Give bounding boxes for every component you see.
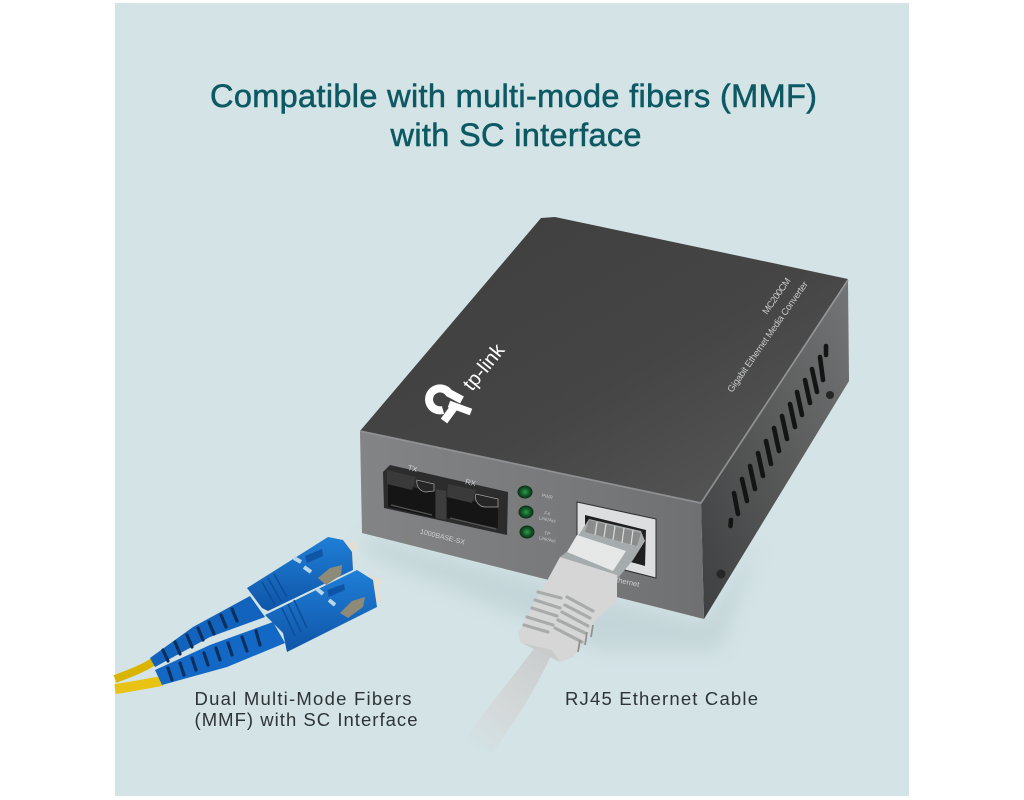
device shadow	[362, 535, 760, 650]
plug boot	[518, 557, 617, 662]
plug head	[560, 519, 645, 578]
background panel	[115, 3, 909, 796]
port labels: TX	[407, 463, 418, 474]
boot notches	[163, 609, 260, 680]
port labels: RX	[464, 477, 477, 488]
top face	[360, 217, 848, 503]
ethernet label: Ethernet	[611, 574, 641, 589]
upper connector	[247, 537, 353, 611]
fiber label	[194, 688, 418, 730]
fiber label: (MMF) with SC Interface	[194, 709, 418, 730]
title: Compatible with multi-mode fibers (MMF)	[210, 78, 817, 114]
SC ports	[383, 465, 508, 535]
cable label: RJ45 Ethernet Cable	[565, 688, 758, 709]
LED labels: FX	[544, 510, 552, 518]
logo: tp-link	[429, 339, 510, 421]
cable	[468, 645, 553, 753]
side vents	[730, 346, 826, 526]
edge highlights	[360, 280, 848, 503]
LED labels: TP	[544, 530, 551, 538]
upper connector detail	[305, 549, 323, 563]
port labels	[407, 463, 477, 547]
boot shade to cable	[522, 643, 560, 662]
RJ45 cable	[468, 519, 645, 753]
logo: tp-link: tp-link	[459, 339, 510, 395]
fiber label: Dual Multi-Mode Fibers	[194, 688, 412, 709]
model text: Gigabit Ethernet Media Converter	[725, 279, 810, 394]
lower boot	[155, 622, 285, 685]
SC fiber connectors	[115, 537, 382, 689]
lower connector	[265, 570, 377, 652]
lower connector detail	[327, 584, 345, 597]
title: with SC interface	[390, 117, 642, 153]
RJ45 port	[577, 502, 656, 578]
title	[210, 78, 817, 153]
LED labels: Link/Act	[538, 515, 557, 525]
side face	[701, 280, 849, 619]
LED labels: Link/Act	[538, 535, 557, 545]
port latches	[387, 470, 416, 490]
front face	[360, 431, 704, 619]
LED labels: PWR	[541, 493, 554, 501]
port labels: 1000BASE-SX	[419, 529, 466, 547]
model text: MC200CM	[760, 275, 793, 316]
yellow fibers	[115, 662, 162, 689]
upper boot	[150, 596, 265, 667]
side screws	[716, 391, 834, 578]
ferrule tips	[343, 538, 382, 604]
status LEDs	[518, 486, 534, 538]
LED labels	[538, 493, 557, 545]
boot ribs	[524, 592, 593, 642]
media converter device	[360, 217, 849, 619]
